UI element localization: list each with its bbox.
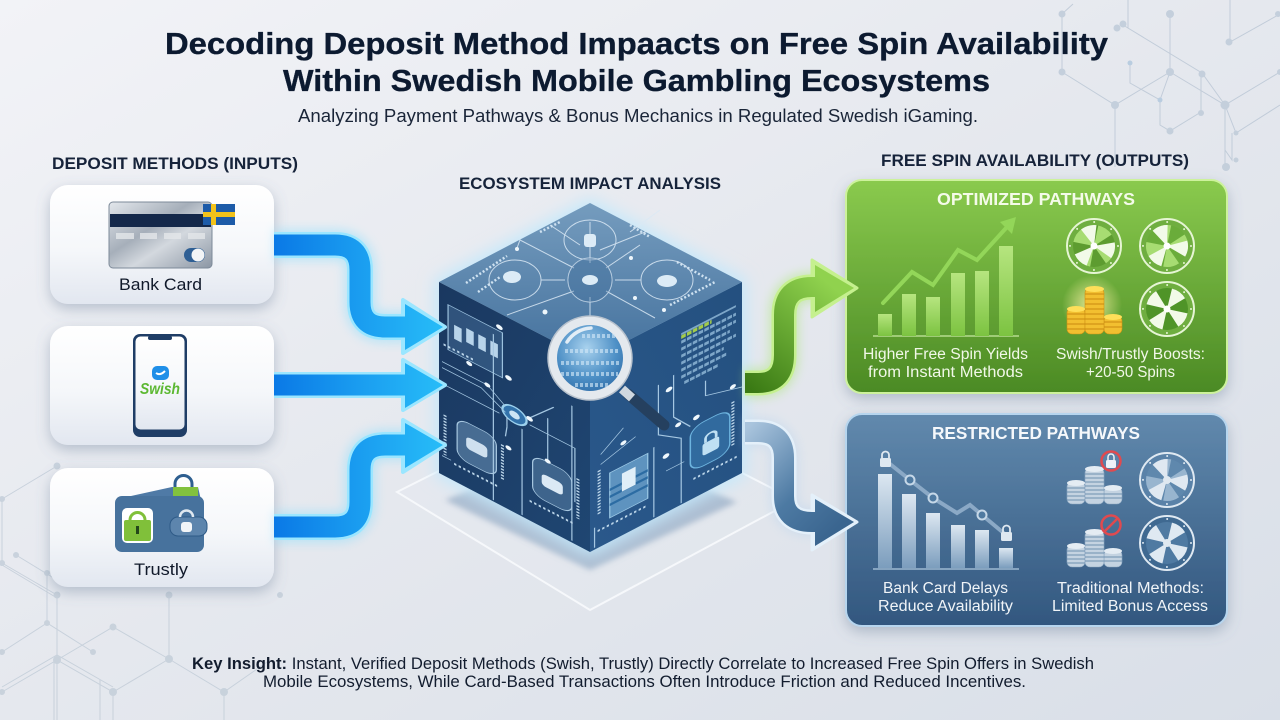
icon: gold coins [1062, 275, 1122, 335]
text: traditional methods: Limited Bonus Access [1052, 598, 1208, 615]
icon: magnifying glass [548, 316, 664, 425]
icon: phone with swish logo [133, 334, 187, 437]
icon: spin wheel [1067, 219, 1121, 273]
cube: ecosystem impact [439, 203, 742, 552]
icon: bank card [109, 202, 235, 268]
network pattern: bottom left [0, 462, 283, 720]
icon: grey spin wheel [1140, 453, 1194, 507]
text: higher free spin yields: Higher Free Spin Yields [863, 346, 1028, 363]
key insight: Key Insight: Instant, Verified Deposit Methods (Swish, Trustly) Directly Correlate to Increased Free Spin Offers in Swedish [192, 655, 1094, 673]
panel: swish [50, 326, 274, 445]
text: swish trustly boosts: +20-50 Spins [1086, 364, 1175, 381]
panel: bank card [50, 185, 274, 304]
icon: wallet with locks [115, 476, 207, 552]
chart: falling availability [873, 452, 1019, 569]
text: higher free spin yields: from Instant Methods [868, 364, 1023, 381]
cube left face [439, 282, 590, 552]
title [165, 27, 1108, 98]
cube top face [439, 203, 742, 360]
text: bank card delays: Bank Card Delays [883, 580, 1008, 597]
panel: optimized pathways [846, 180, 1227, 393]
arrow: trustly to cube [274, 420, 445, 527]
text: traditional methods [1052, 580, 1208, 615]
icon: grey spin wheel [1140, 516, 1194, 570]
arrow: swish to cube [274, 360, 445, 410]
subtitle: Analyzing Payment Pathways & Bonus Mechanics in Regulated Swedish iGaming. [298, 105, 978, 126]
text: higher free spin yields [863, 346, 1028, 381]
heading: deposit methods: DEPOSIT METHODS (INPUTS) [52, 154, 298, 173]
network pattern: top right [1058, 0, 1280, 171]
text: swish trustly boosts: Swish/Trustly Boosts: [1056, 346, 1205, 363]
cube right face [590, 282, 742, 552]
icon: locked coins [1067, 452, 1122, 504]
key insight: Mobile Ecosystems, While Card-Based Transactions Often Introduce Friction and Reduced Incentives. [263, 673, 1026, 691]
heading: ecosystem impact analysis: ECOSYSTEM IMPACT ANALYSIS [459, 174, 721, 193]
arrow: cube to optimized pathways [745, 260, 857, 383]
text: bank card delays: Reduce Availability [878, 598, 1013, 615]
panel: restricted pathways [846, 414, 1227, 626]
icon: blocked coins [1067, 516, 1122, 567]
panel: trustly [50, 468, 274, 587]
text: bank card delays [878, 580, 1013, 615]
chart: rising free spin yields [873, 217, 1019, 336]
title: Within Swedish Mobile Gambling Ecosystems [283, 64, 990, 98]
heading: restricted pathways: RESTRICTED PATHWAYS [932, 423, 1140, 443]
label: bank card: Bank Card [119, 275, 202, 294]
label: trustly: Trustly [134, 560, 189, 579]
icon: phone with swish logo: Swish [140, 381, 180, 398]
arrow: cube to restricted pathways [745, 432, 857, 550]
arrow: bank card to cube [274, 245, 445, 353]
heading: optimized pathways: OPTIMIZED PATHWAYS [937, 189, 1135, 209]
icon: spin wheel [1140, 219, 1194, 273]
heading: free spin availability: FREE SPIN AVAILABILITY (OUTPUTS) [881, 151, 1189, 170]
text: swish trustly boosts [1056, 346, 1205, 381]
platform under cube [397, 395, 795, 610]
text: traditional methods: Traditional Methods: [1057, 580, 1204, 597]
key insight [192, 655, 1094, 691]
title: Decoding Deposit Method Impaacts on Free Spin Availability [165, 27, 1108, 61]
icon: spin wheel [1140, 282, 1194, 336]
